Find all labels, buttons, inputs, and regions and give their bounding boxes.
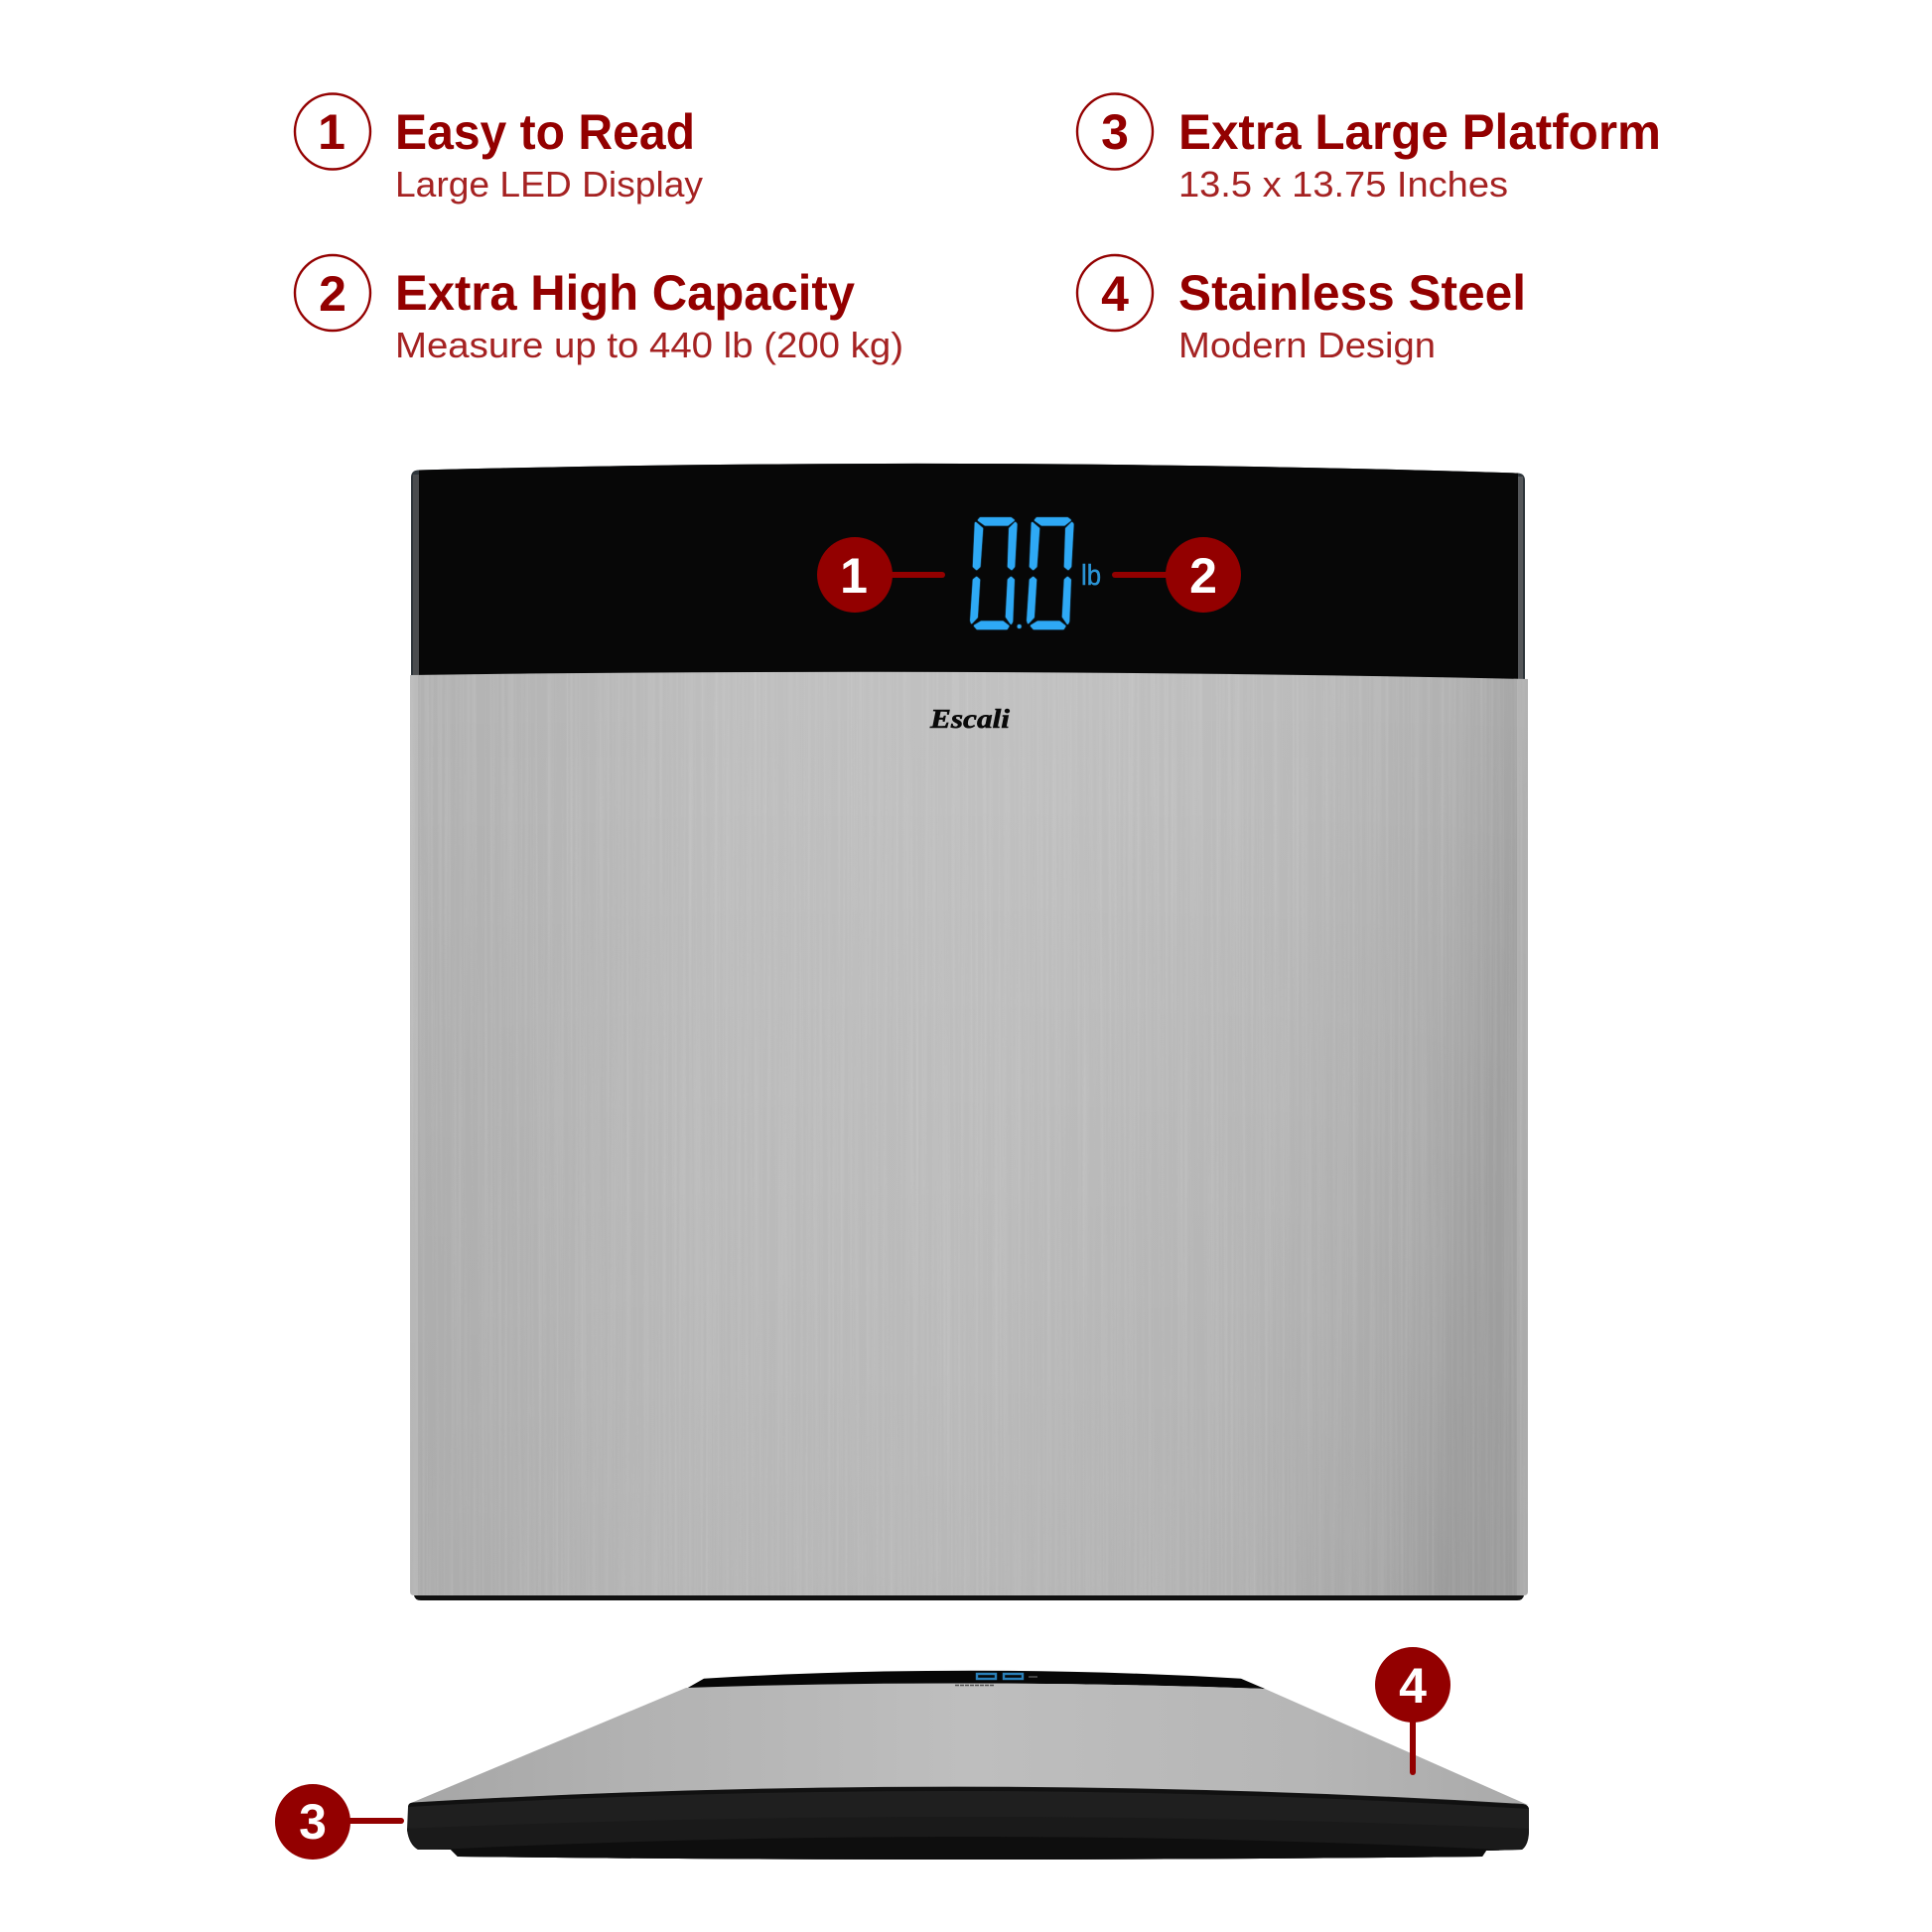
- number circle 2: [295, 255, 370, 331]
- subtext: Modern Design: Modern Design: [1178, 325, 1436, 365]
- heading: Extra Large Platform: Extra Large Platform: [1178, 104, 1661, 160]
- leader line: [874, 572, 942, 578]
- scale side perspective view: [402, 1671, 1534, 1866]
- callout 3 pointing at base edge: [275, 1784, 401, 1860]
- mini logo: [955, 1684, 995, 1686]
- subtext: dimensions: 13.5 x 13.75 Inches: [1178, 164, 1508, 205]
- brand logo Escali: Escali: [929, 704, 1011, 734]
- leader line: [338, 1818, 401, 1824]
- badge 1: 1: [840, 548, 868, 604]
- badge 2: 2: [1189, 548, 1217, 604]
- unit label lb: lb: [1081, 560, 1101, 592]
- callout 4 pointing at steel: [1375, 1647, 1450, 1772]
- subtext: Large LED Display: Large LED Display: [395, 164, 703, 205]
- far black edge: [686, 1671, 1265, 1689]
- second digit: [1028, 518, 1073, 628]
- number circle 4: 4: [1101, 266, 1129, 322]
- number circle 3: [1077, 93, 1153, 169]
- first digit: [971, 518, 1017, 628]
- scale top view: [410, 464, 1528, 1600]
- brushed steel panel: [410, 665, 1528, 1598]
- heading: Easy to Read: Easy to Read: [395, 104, 695, 160]
- callout 1 pointing at display: [817, 537, 942, 613]
- heading: Extra High Capacity: Extra High Capacity: [395, 265, 855, 321]
- feature 4: Stainless Steel: [1077, 255, 1526, 365]
- LED display reading 0.0: [971, 518, 1073, 628]
- decimal point: [1018, 624, 1022, 628]
- steel surface: [411, 1683, 1528, 1805]
- feature 1: Easy to Read: [295, 93, 703, 205]
- callout 2 pointing at display: [1115, 537, 1241, 613]
- badge 4: 4: [1399, 1658, 1427, 1714]
- subtext: Measure up to 440 lb: Measure up to 440 lb (200 kg): [395, 325, 903, 365]
- leader line: [1410, 1708, 1416, 1772]
- number circle 1: [295, 93, 370, 169]
- badge 3: 3: [299, 1794, 327, 1850]
- feature 2: Extra High Capacity: [295, 255, 903, 365]
- mini LED display: [977, 1674, 1037, 1679]
- number circle 4: [1077, 255, 1153, 331]
- black base: [402, 1787, 1534, 1866]
- heading: Stainless Steel: Stainless Steel: [1178, 265, 1526, 321]
- leader line: [1115, 572, 1181, 578]
- number circle 2: 2: [319, 266, 346, 322]
- underside shadow edge: [414, 1588, 1524, 1600]
- number circle 3: 3: [1101, 104, 1129, 160]
- number circle 1: 1: [318, 104, 345, 160]
- feature 3: Extra Large Platform: [1077, 93, 1661, 205]
- black display panel: [411, 464, 1525, 681]
